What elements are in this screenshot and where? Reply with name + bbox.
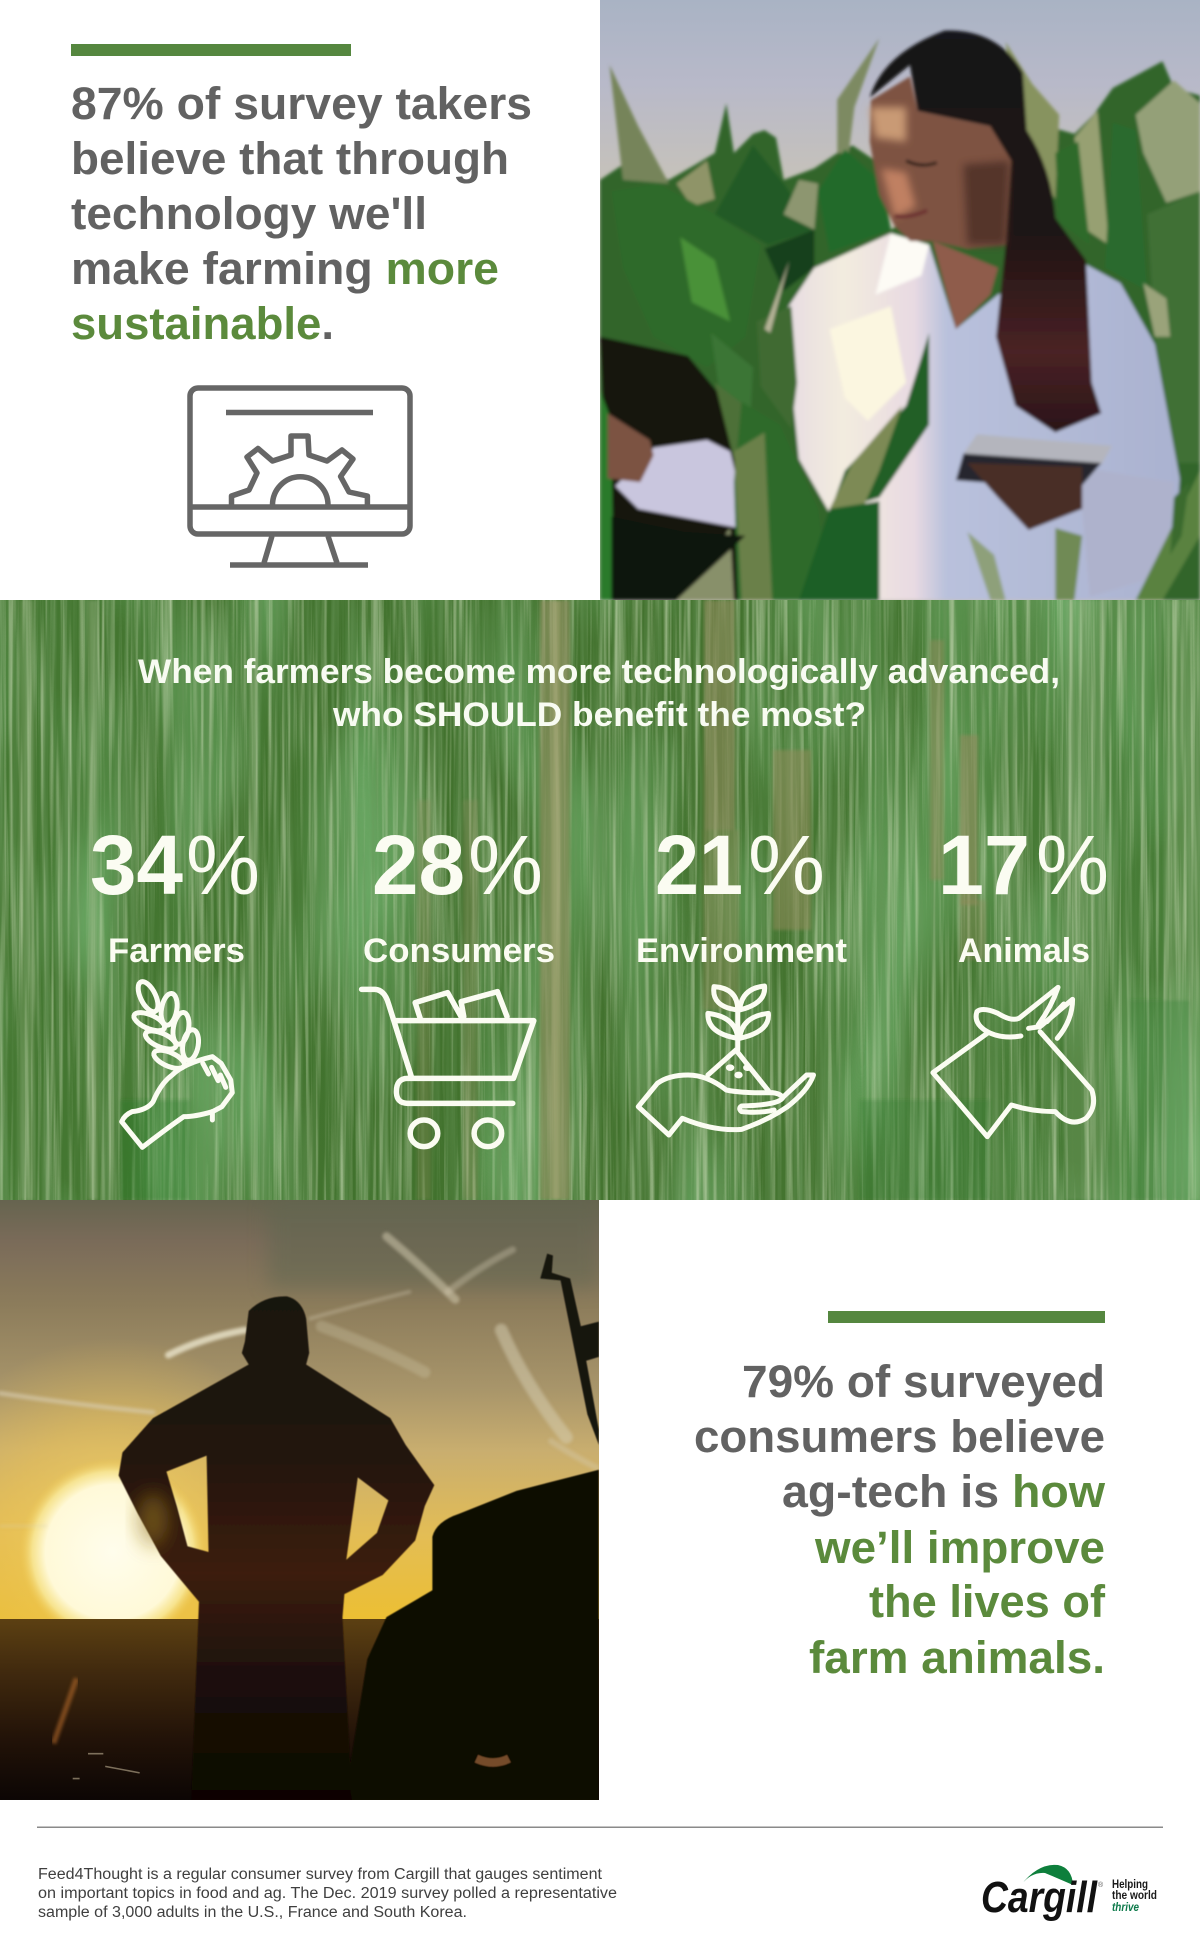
heading: 79% of surveyed consumers: consumers believe bbox=[694, 1411, 1105, 1462]
stat: 21% environment: Environment bbox=[636, 932, 847, 970]
stat: 34% farmers: 34 bbox=[90, 818, 183, 912]
question heading bbox=[138, 658, 1058, 726]
hair ponytail bbox=[870, 31, 1101, 432]
accent bar bbox=[828, 1311, 1105, 1323]
question heading: who SHOULD benefit the most? bbox=[332, 696, 866, 734]
tagline: Helping bbox=[1112, 1879, 1148, 1891]
heading: 79% of surveyed consumers: the lives of bbox=[869, 1576, 1106, 1627]
tagline: the world bbox=[1112, 1890, 1157, 1902]
stat: 21% environment bbox=[638, 835, 847, 962]
photo: woman in corn field with tablet bbox=[600, 0, 1200, 600]
tablet and hand bbox=[964, 434, 1112, 465]
stat: 34% farmers bbox=[92, 835, 258, 962]
stat: 34% farmers: % bbox=[186, 818, 260, 912]
icon: hand holding wheat bbox=[122, 979, 232, 1147]
logo: Cargill bbox=[981, 1865, 1157, 1922]
stat: 28% consumers: % bbox=[468, 818, 543, 912]
logo leaf bbox=[1021, 1865, 1073, 1885]
panel: top-left statistic bbox=[0, 0, 600, 600]
heading: 87% of survey takers: sustainable. bbox=[71, 298, 334, 349]
stat: 17% animals: 17 bbox=[938, 818, 1030, 912]
stat: 28% consumers: 28 bbox=[372, 818, 465, 912]
panel: green field band bbox=[0, 600, 1200, 1200]
stat: 17% animals: Animals bbox=[958, 932, 1090, 970]
heading: 87% of survey takers: make farming more bbox=[71, 243, 499, 294]
tagline bbox=[1112, 1879, 1157, 1914]
footer text: sample of 3,000 adults in the U.S., France and South Korea. bbox=[38, 1904, 467, 1921]
green leaves in front of shirt bbox=[757, 306, 797, 429]
face bbox=[870, 77, 1011, 249]
heading: 87% of survey takers: believe that through bbox=[71, 133, 509, 184]
tractor silhouette bbox=[344, 1470, 599, 1800]
heading: 79% of surveyed consumers: farm animals. bbox=[809, 1632, 1105, 1683]
footer text: Feed4Thought is a regular consumer survey from Cargill that gauges sentiment bbox=[38, 1866, 603, 1883]
heading: 87% of survey takers bbox=[71, 78, 532, 349]
icon: cow head bbox=[933, 987, 1094, 1137]
neck and collar bbox=[933, 241, 998, 329]
stat: 17% animals: % bbox=[1036, 818, 1109, 912]
shirt bbox=[784, 233, 1180, 600]
sleeve and left hand bbox=[615, 440, 749, 530]
photo: farmer silhouette at sunset bbox=[0, 1200, 600, 1800]
stat: 21% environment: 21 bbox=[655, 818, 743, 912]
registered mark: ® bbox=[1098, 1881, 1104, 1889]
heading: 87% of survey takers: technology we'll bbox=[71, 188, 427, 239]
tagline: thrive bbox=[1112, 1902, 1140, 1914]
heading: 79% of surveyed consumers: we’ll improve bbox=[814, 1522, 1105, 1573]
stat: 28% consumers: Consumers bbox=[363, 932, 555, 970]
footer text: on important topics in food and ag. The Dec. 2019 survey polled a representative bbox=[38, 1885, 617, 1902]
stat: 34% farmers: Farmers bbox=[108, 932, 245, 970]
stat: 21% environment: % bbox=[748, 818, 825, 912]
stat: 28% consumers bbox=[364, 835, 554, 962]
icon: shopping cart bbox=[362, 989, 534, 1147]
heading: 87% of survey takers: 87% of survey takers bbox=[71, 78, 532, 129]
question heading: When farmers become more technologically advanced, bbox=[138, 653, 1060, 691]
heading: 79% of surveyed consumers: ag-tech is how bbox=[782, 1466, 1106, 1517]
icon: hand holding plant bbox=[638, 986, 814, 1135]
stat: 17% animals bbox=[943, 836, 1106, 962]
farmer silhouette bbox=[119, 1296, 434, 1800]
panel: bottom-right statistic bbox=[694, 1311, 1106, 1683]
accent bar bbox=[71, 44, 351, 56]
icon: monitor with gear bbox=[190, 388, 410, 565]
footer text bbox=[38, 1866, 617, 1921]
heading: 79% of surveyed consumers: 79% of surveyed bbox=[742, 1356, 1105, 1407]
logo wordmark: Cargill bbox=[981, 1873, 1098, 1922]
heading: 79% of surveyed consumers bbox=[694, 1356, 1106, 1683]
